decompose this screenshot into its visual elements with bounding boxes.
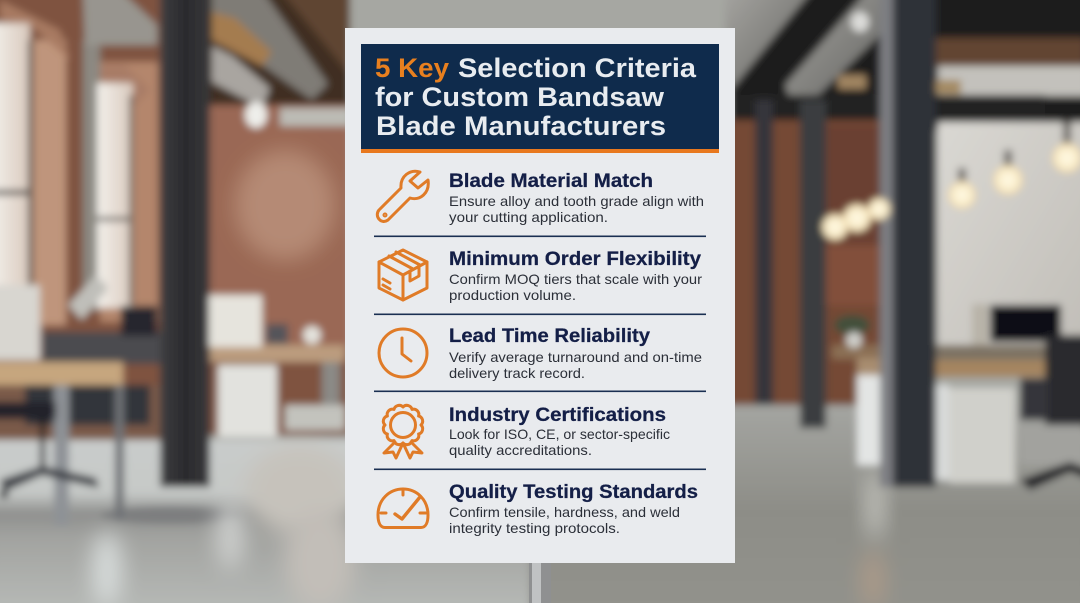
- heading: Industry Certifications: [449, 405, 666, 426]
- description: production volume.: [449, 287, 576, 303]
- left column: [160, 0, 210, 487]
- heading: Quality Testing Standards: [449, 482, 698, 503]
- right desks: [990, 305, 1061, 342]
- left desks: [0, 285, 40, 360]
- ceiling left: [210, 0, 350, 105]
- description: Confirm tensile, hardness, and weld: [449, 504, 680, 520]
- icon: gauge with check: [378, 489, 428, 528]
- description: your cutting application.: [449, 209, 608, 225]
- icon: wrench: [377, 171, 428, 221]
- right columns: [755, 100, 773, 405]
- right ceiling: [730, 0, 1080, 130]
- left brick: [0, 0, 350, 435]
- description: Ensure alloy and tooth grade align with: [449, 193, 704, 209]
- left windows: [33, 40, 66, 325]
- description: Look for ISO, CE, or sector-specific: [449, 426, 670, 442]
- pole: [529, 563, 551, 603]
- description: Confirm MOQ tiers that scale with your: [449, 271, 702, 287]
- title: [375, 53, 697, 141]
- description: integrity testing protocols.: [449, 520, 620, 536]
- description: Verify average turnaround and on-time: [449, 349, 702, 365]
- right brick: [725, 120, 885, 405]
- item 4: industry certifications: [383, 405, 670, 458]
- heading: Lead Time Reliability: [449, 326, 650, 347]
- item 2: minimum order flexibility: [379, 249, 702, 303]
- pendant lamps: [958, 168, 966, 182]
- heading: Minimum Order Flexibility: [449, 249, 701, 270]
- right main column: [880, 0, 895, 487]
- title: Blade Manufacturers: [376, 111, 666, 141]
- icon: award ribbon: [383, 405, 423, 458]
- right wall: [938, 122, 1080, 372]
- title: Selection Criteria: [458, 53, 697, 83]
- sign board: [345, 28, 735, 563]
- title: 5 Key: [375, 53, 449, 83]
- floor: [0, 440, 550, 603]
- description: delivery track record.: [449, 365, 585, 381]
- icon: clock: [379, 329, 427, 377]
- heading: Blade Material Match: [449, 171, 653, 192]
- item 1: blade material match: [377, 171, 704, 225]
- item 3: lead time reliability: [379, 326, 702, 381]
- right floor: [530, 405, 1080, 603]
- icon: box: [379, 250, 427, 300]
- item 5: quality testing standards: [378, 482, 698, 536]
- description: quality accreditations.: [449, 442, 592, 458]
- title: for Custom Bandsaw: [375, 82, 665, 112]
- header banner: [361, 44, 719, 153]
